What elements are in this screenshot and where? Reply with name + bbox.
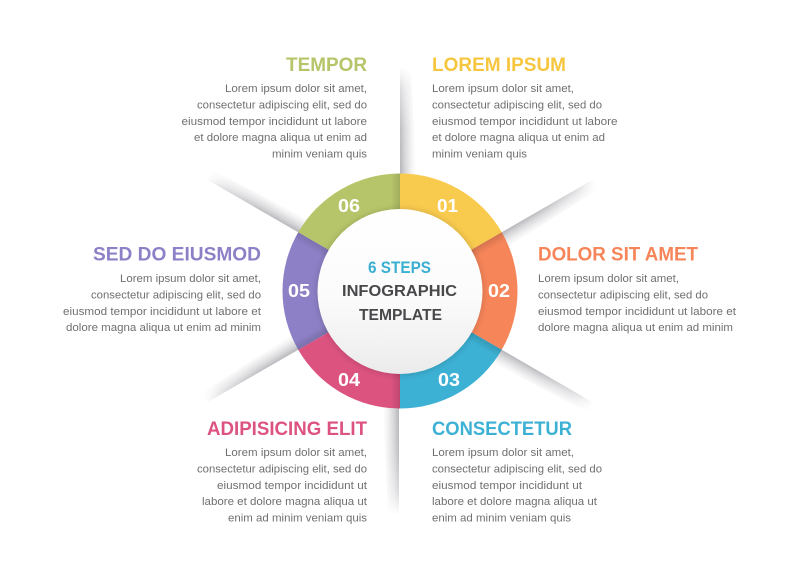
text block: Lorem ipsum dolor sit amet, xyxy=(538,273,679,285)
heading: LOREM IPSUM xyxy=(432,55,566,76)
text block xyxy=(432,83,618,160)
text block: consectetur adipiscing elit, sed do xyxy=(91,290,261,302)
text block: labore et dolore magna aliqua ut xyxy=(202,496,367,508)
text block: dolore magna aliqua ut enim ad minim xyxy=(538,322,733,334)
segment 03 xyxy=(400,291,502,408)
heading: SED DO EIUSMOD xyxy=(93,244,261,266)
step numbers: 03 xyxy=(438,370,460,390)
text block xyxy=(63,273,261,334)
heading: ADIPISICING ELIT xyxy=(207,419,367,440)
text block: Lorem ipsum dolor sit amet, xyxy=(120,273,261,285)
text block: consectetur adipiscing elit, sed do xyxy=(197,100,367,112)
heading: DOLOR SIT AMET xyxy=(538,244,698,266)
text block: consectetur adipiscing elit, sed do xyxy=(538,290,708,302)
heading: CONSECTETUR xyxy=(432,419,572,440)
text block: enim ad minim veniam quis xyxy=(432,512,572,524)
text block: labore et dolore magna aliqua ut xyxy=(432,496,597,508)
step numbers: 04 xyxy=(338,370,360,390)
segment 04 xyxy=(298,291,400,408)
panel: tempor xyxy=(182,55,368,160)
text block: Lorem ipsum dolor sit amet, xyxy=(225,447,367,459)
text block: Lorem ipsum dolor sit amet, xyxy=(225,83,367,95)
center subtitle: 6 STEPS xyxy=(368,258,431,277)
heading: TEMPOR xyxy=(286,55,367,76)
text block xyxy=(538,273,736,334)
step numbers: 05 xyxy=(288,281,310,301)
step numbers: 01 xyxy=(437,196,458,216)
center title: INFOGRAPHIC xyxy=(342,283,457,300)
text block: et dolore magna aliqua ut enim ad xyxy=(194,132,367,144)
segment 05 xyxy=(282,232,400,350)
text block: eiusmod tempor incididunt ut xyxy=(432,480,582,492)
text block: Lorem ipsum dolor sit amet, xyxy=(432,83,574,95)
text block: consectetur adipiscing elit, sed do xyxy=(197,464,367,476)
panel: sed do eiusmod xyxy=(63,244,261,334)
center title: TEMPLATE xyxy=(359,307,442,324)
segment 01 xyxy=(400,174,502,291)
spoke shadows xyxy=(198,67,602,515)
panel: lorem ipsum xyxy=(432,55,618,160)
text block: minim veniam quis xyxy=(272,148,368,160)
text block: eiusmod tempor incididunt ut labore et xyxy=(63,306,261,318)
text block: eiusmod tempor incididunt ut labore xyxy=(182,116,367,128)
step numbers xyxy=(288,196,510,390)
text block: enim ad minim veniam quis xyxy=(228,512,368,524)
panel: adipisicing elit xyxy=(197,419,368,524)
text block xyxy=(197,447,368,524)
text block: eiusmod tempor incididunt ut xyxy=(217,480,367,492)
text block: consectetur adipiscing elit, sed do xyxy=(432,100,602,112)
text block xyxy=(182,83,368,160)
center circle xyxy=(318,209,482,374)
text block xyxy=(432,447,602,524)
text block: dolore magna aliqua ut enim ad minim xyxy=(66,322,261,334)
panel: dolor sit amet xyxy=(538,244,736,334)
panel: consectetur xyxy=(432,419,602,524)
segment 02 xyxy=(400,232,518,350)
text block: Lorem ipsum dolor sit amet, xyxy=(432,447,574,459)
text block: consectetur adipiscing elit, sed do xyxy=(432,464,602,476)
text block: et dolore magna aliqua ut enim ad xyxy=(432,132,605,144)
center title xyxy=(342,283,457,324)
step numbers: 02 xyxy=(488,281,510,301)
text block: eiusmod tempor incididunt ut labore et xyxy=(538,306,736,318)
segment 06 xyxy=(298,174,400,291)
text block: minim veniam quis xyxy=(432,148,528,160)
segmented ring xyxy=(282,169,518,413)
text block: eiusmod tempor incididunt ut labore xyxy=(432,116,618,128)
step numbers: 06 xyxy=(338,196,360,216)
